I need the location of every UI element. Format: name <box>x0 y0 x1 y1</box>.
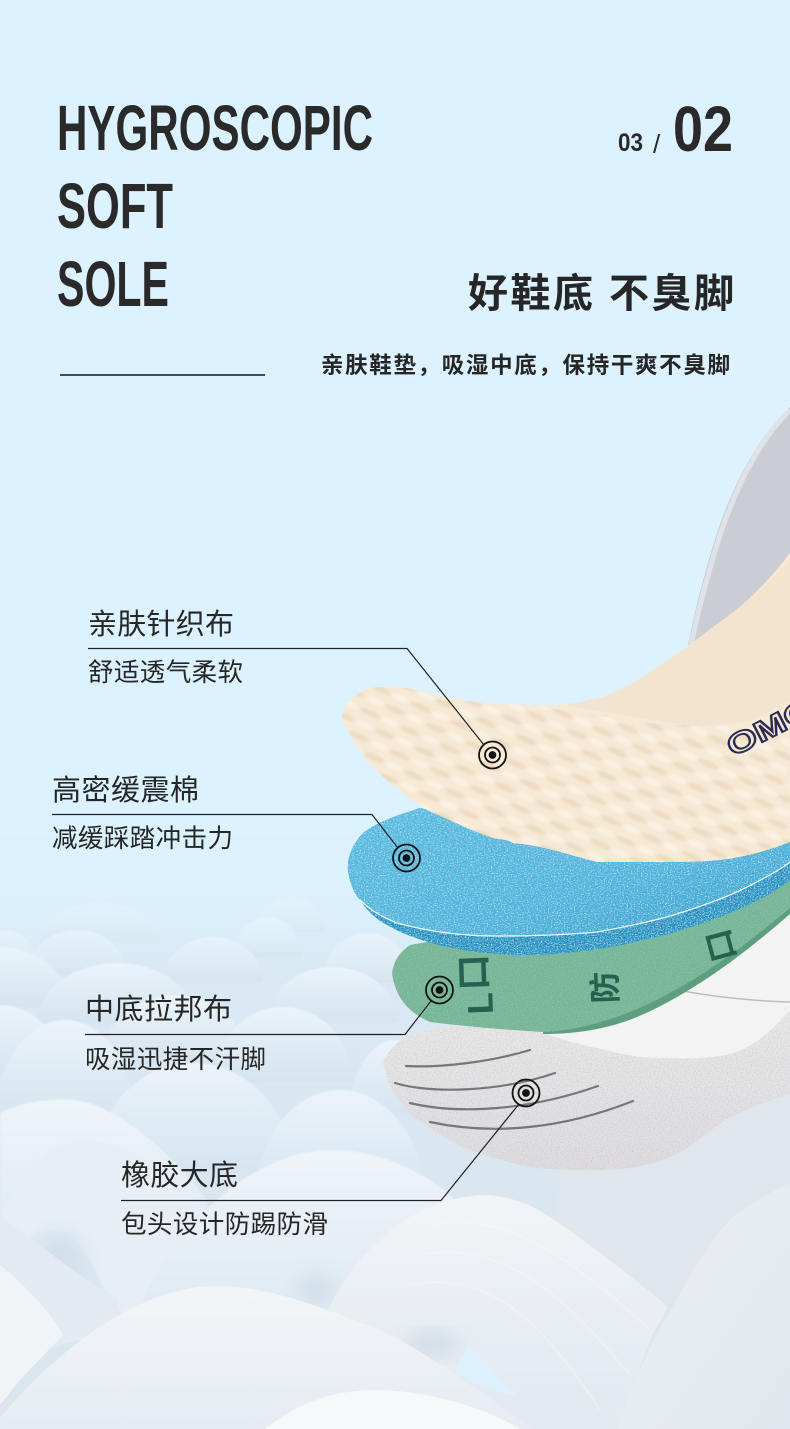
headline: 好鞋底 不臭脚 <box>468 272 734 316</box>
callout: rubber sole: 橡胶大底 <box>121 1159 238 1192</box>
callout: cushioning foam: 高密缓震棉 <box>52 774 199 807</box>
callout: rubber sole: 包头设计防踢防滑 <box>121 1211 328 1239</box>
subheading: 亲肤鞋垫，吸湿中底，保持干爽不臭脚 <box>321 353 730 378</box>
icon: target marker <box>512 1080 540 1106</box>
insole: white inner base <box>500 900 790 1090</box>
page number <box>618 93 733 165</box>
insole: beige knit top layer <box>330 553 790 870</box>
rule <box>60 374 265 376</box>
callout: cushioning foam: 减缓踩踏冲击力 <box>52 825 233 853</box>
insole: green mid layer: 防 <box>587 971 624 1004</box>
page number: 02 <box>673 93 733 165</box>
callout: knit fabric: 亲肤针织布 <box>88 608 234 641</box>
title: SOFT <box>57 170 173 242</box>
background: mid cotton arches <box>0 1080 790 1429</box>
insole: blue foam layer <box>348 808 790 955</box>
insole: grey heel cup <box>688 407 790 645</box>
page number: 03 <box>618 129 643 157</box>
background: far cotton scallops <box>0 897 440 1200</box>
callout: cushioning foam <box>52 774 420 872</box>
callout: midsole fabric <box>85 976 453 1074</box>
insole: green mid layer: 口 <box>700 925 743 966</box>
title: HYGROSCOPIC <box>57 92 373 164</box>
icon: target marker <box>426 976 453 1004</box>
background: foreground cotton arches <box>0 1183 790 1429</box>
callout: knit fabric: 舒适透气柔软 <box>88 659 243 687</box>
title <box>57 92 373 320</box>
insole: green mid layer <box>392 880 790 1034</box>
insole: green mid layer: 口 <box>453 954 495 991</box>
callout: rubber sole <box>121 1080 540 1239</box>
title: SOLE <box>57 248 169 320</box>
callout: midsole fabric: 中底拉邦布 <box>85 993 232 1026</box>
callout: midsole fabric: 吸湿迅捷不汗脚 <box>85 1046 266 1074</box>
callout: knit fabric <box>88 608 506 768</box>
insole: rubber outsole <box>383 1010 790 1170</box>
page number: / <box>653 129 661 159</box>
icon: target marker <box>393 844 420 872</box>
background: top fade <box>0 850 790 980</box>
insole: green mid layer: L <box>459 992 501 1015</box>
icon: target marker <box>479 742 506 768</box>
